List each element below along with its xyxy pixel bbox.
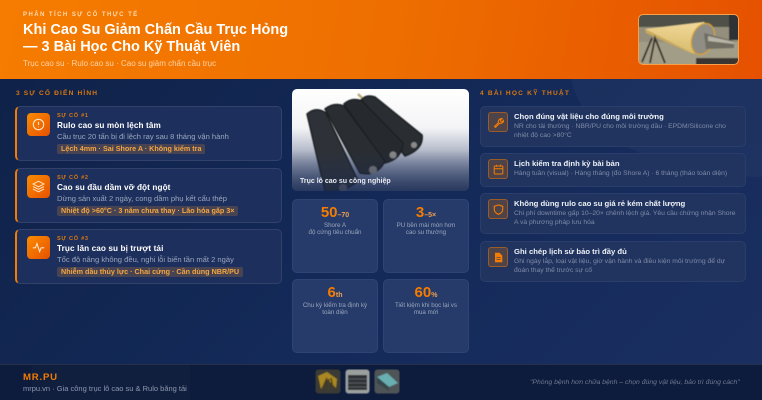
panel: lesson 3: Chi phí downtime gấp 10–20× chênh lệch giá. Yêu cầu chứng nhận Shore bbox=[514, 210, 736, 217]
title: — 3 Bài Học Cho Kỹ Thuật Viên bbox=[23, 39, 240, 55]
stat: inspection bbox=[292, 279, 378, 353]
stat: savings: Tiết kiệm khi bọc lại vs mua mới bbox=[395, 302, 457, 316]
photo: black rubber rollers bbox=[292, 89, 469, 191]
panel: lesson 4: Ghi chép lịch sử bảo trì đầy đủ bbox=[514, 247, 627, 256]
footer bbox=[0, 364, 762, 400]
stat: inspection: Chu kỳ kiểm tra định kỳ toàn diện bbox=[303, 302, 367, 316]
icon: layers bbox=[27, 175, 50, 198]
panel: incident 1 bbox=[15, 106, 282, 161]
panel: lesson 4: đoán thay thế trước sự cố bbox=[514, 267, 592, 274]
stat: hardness: Shore A bbox=[324, 222, 346, 229]
panel: lesson 2: Lịch kiểm tra định kỳ bài bản bbox=[514, 159, 620, 168]
icon: calendar bbox=[488, 159, 508, 179]
title bbox=[23, 22, 288, 55]
panel: lesson 2 bbox=[480, 153, 746, 187]
stat: durability: 3–5× bbox=[416, 204, 436, 221]
stat: savings: 60% bbox=[415, 284, 437, 301]
heading: 4 lessons: 4 BÀI HỌC KỸ THUẬT bbox=[480, 90, 570, 97]
panel: lesson 4: Ghi ngày lắp, loại vật liệu, giờ vận hành và điều kiện môi trường để dự bbox=[514, 258, 725, 265]
panel: incident 1: Rulo cao su mòn lệch tâm bbox=[57, 121, 161, 130]
panel: incident 3: Nhiễm dầu thủy lực · Chai cứng · Cần dùng NBR/PU bbox=[61, 267, 239, 276]
stat: hardness: 50–70 bbox=[321, 204, 349, 221]
stat: durability: PU bền mài mòn hơn cao su thường bbox=[397, 222, 455, 236]
header banner bbox=[0, 0, 762, 79]
panel: incident 2: Cao su đầu dầm vỡ đột ngột bbox=[57, 183, 170, 192]
panel: lesson 3 bbox=[480, 193, 746, 234]
heading: 3 incidents: 3 SỰ CỐ ĐIỂN HÌNH bbox=[16, 90, 98, 97]
stat: hardness: độ cứng tiêu chuẩn bbox=[308, 229, 362, 236]
panel: incident 3: SỰ CỐ #3 bbox=[57, 236, 89, 242]
footer decorative band bbox=[32, 365, 190, 400]
stat: inspection: 6th bbox=[328, 284, 342, 301]
panel: lesson 2: Hàng tuần (visual) · Hàng tháng (đo Shore A) · 6 tháng (tháo toàn diện) bbox=[514, 170, 727, 177]
stat: durability bbox=[383, 199, 469, 273]
brand description: mrpu.vn · Gia công trục lô cao su & Rulo băng tải bbox=[23, 384, 187, 393]
panel: lesson 1: Chọn đúng vật liệu cho đúng môi trường bbox=[514, 112, 664, 121]
panel: incident 1: SỰ CỐ #1 bbox=[57, 113, 89, 119]
decorative arc bbox=[543, 79, 762, 364]
stat: hardness bbox=[292, 199, 378, 273]
eyebrow: PHÂN TÍCH SỰ CỐ THỰC TẾ bbox=[23, 12, 139, 18]
caption: Trục lô cao su công nghiệp bbox=[300, 178, 391, 185]
panel: incident 2 bbox=[15, 168, 282, 223]
icon: document bbox=[488, 247, 508, 267]
panel: lesson 3: Không dùng rulo cao su giá rẻ kém chất lượng bbox=[514, 199, 685, 208]
panel: lesson 4 bbox=[480, 241, 746, 282]
panel: incident 2: Dừng sản xuất 2 ngày, cong dầm phụ kết cấu thép bbox=[57, 194, 227, 203]
title: Khi Cao Su Giảm Chấn Cầu Trục Hỏng bbox=[23, 22, 288, 38]
panel: incident 1: Lệch 4mm · Sai Shore A · Không kiểm tra bbox=[61, 144, 201, 153]
icon: wrench bbox=[488, 112, 508, 132]
brand: MR.PU bbox=[23, 372, 58, 383]
panel: incident 1: Cầu trục 20 tấn bị đi lệch ray sau 8 tháng vận hành bbox=[57, 132, 229, 141]
background bbox=[0, 79, 762, 364]
panel: incident 2: Nhiệt độ >60°C · 3 năm chưa thay · Lão hóa gấp 3× bbox=[61, 206, 234, 215]
icon: alert bbox=[27, 113, 50, 136]
quote: "Phòng bệnh hơn chữa bệnh – chọn đúng vật liệu, bảo trì đúng cách" bbox=[530, 379, 740, 386]
icon: pulse bbox=[27, 236, 50, 259]
panel: incident 3: Trục lăn cao su bị trượt tải bbox=[57, 244, 163, 253]
panel: lesson 1: NR cho tải thường · NBR/PU cho môi trường dầu · EPDM/Silicone cho bbox=[514, 123, 726, 130]
panel: incident 3 bbox=[15, 229, 282, 284]
panel: lesson 1: nhiệt độ cao >80°C bbox=[514, 132, 572, 139]
panel: incident 3: Tốc độ nâng không đều, nghi lỗi biến tần mất 2 ngày bbox=[57, 255, 234, 264]
stat: savings bbox=[383, 279, 469, 353]
icon: shield bbox=[488, 199, 508, 219]
subtitle: Trục cao su · Rulo cao su · Cao su giảm chấn cầu trục bbox=[23, 59, 216, 68]
panel: lesson 3: A và phương pháp lưu hóa bbox=[514, 219, 595, 226]
header photo: yellow roller bbox=[638, 14, 739, 65]
thumbnails bbox=[315, 369, 400, 394]
panel: lesson 1 bbox=[480, 106, 746, 147]
panel: incident 2: SỰ CỐ #2 bbox=[57, 175, 89, 181]
